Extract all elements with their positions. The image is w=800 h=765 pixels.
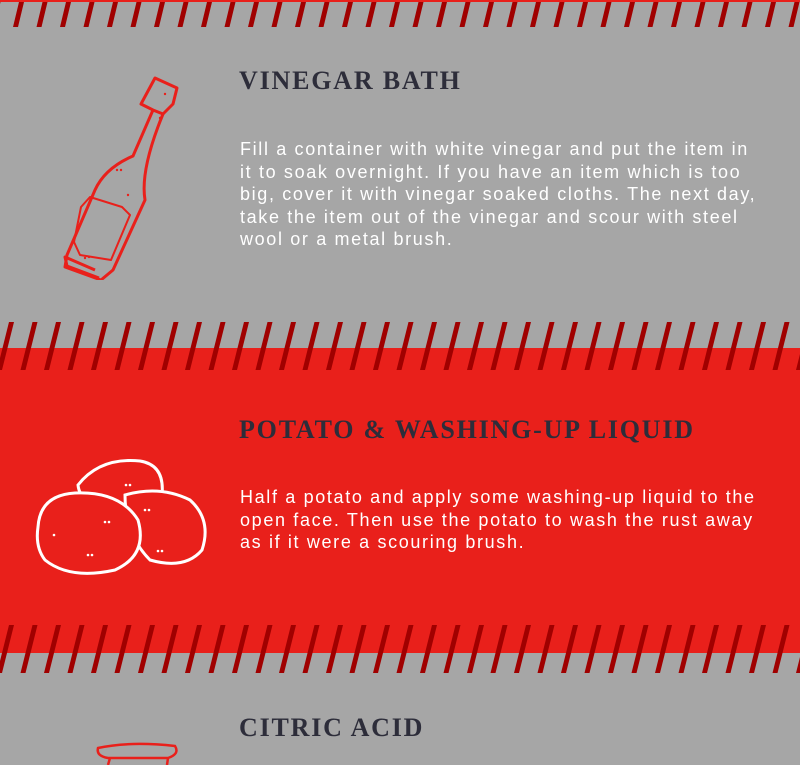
text: vinegar bath bbox=[240, 139, 756, 249]
heading: citric acid: CITRIC ACID bbox=[239, 713, 424, 742]
icon: vinegar bottle bbox=[64, 76, 178, 280]
text: potato: open face. Then use the potato to wash the rust away bbox=[240, 510, 754, 530]
text: vinegar bath: it to soak overnight. If you have an item which is too bbox=[240, 162, 741, 182]
text: vinegar bath: big, cover it with vinegar soaked cloths. The next day, bbox=[240, 184, 756, 204]
text: potato: as if it were a scouring brush. bbox=[240, 532, 525, 552]
text: vinegar bath: wool or a metal brush. bbox=[240, 229, 453, 249]
icon: potatoes bbox=[36, 459, 207, 575]
icon: citric acid jar bbox=[96, 742, 178, 765]
heading: vinegar bath: VINEGAR BATH bbox=[239, 66, 462, 95]
text: vinegar bath: take the item out of the vinegar and scour with steel bbox=[240, 206, 739, 226]
text: potato bbox=[240, 487, 756, 552]
text: vinegar bath: Fill a container with white vinegar and put the item in bbox=[240, 139, 749, 159]
text: potato: Half a potato and apply some washing-up liquid to the bbox=[240, 487, 756, 507]
heading: potato: POTATO & WASHING-UP LIQUID bbox=[239, 415, 695, 444]
